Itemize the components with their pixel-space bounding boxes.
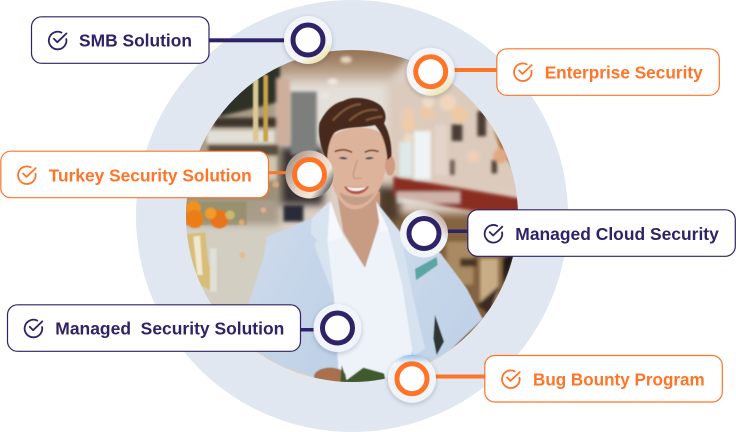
connector bbox=[446, 230, 468, 233]
collar bbox=[330, 201, 389, 230]
item: Managed Security Solution bbox=[8, 304, 362, 352]
icon: check bbox=[25, 320, 42, 337]
text: Managed Security Solution bbox=[55, 318, 284, 338]
connector bbox=[299, 328, 317, 332]
portrait photo bbox=[180, 45, 527, 392]
node bbox=[314, 304, 362, 352]
node bbox=[388, 355, 436, 403]
text: Enterprise Security bbox=[545, 63, 703, 83]
blazer bbox=[248, 218, 339, 377]
icon: check bbox=[514, 63, 532, 81]
icon: check bbox=[18, 166, 36, 184]
stubble bbox=[339, 192, 375, 205]
item: SMB Solution bbox=[32, 16, 332, 64]
connector bbox=[452, 68, 497, 72]
hand and greens bbox=[314, 367, 346, 382]
node bbox=[286, 150, 334, 198]
icon: check bbox=[49, 32, 66, 49]
icon: check bbox=[485, 225, 502, 243]
connector bbox=[267, 171, 289, 174]
connector bbox=[434, 374, 485, 378]
item: Enterprise Security bbox=[407, 48, 719, 96]
neck bbox=[337, 192, 380, 268]
nose shading bbox=[353, 160, 362, 178]
eyes bbox=[339, 157, 374, 159]
node bbox=[400, 210, 448, 258]
white shirt bbox=[325, 202, 413, 385]
node bbox=[284, 16, 332, 64]
pocket square bbox=[415, 257, 438, 280]
hair bbox=[319, 98, 391, 160]
lapels bbox=[311, 202, 333, 293]
item: Turkey Security Solution bbox=[1, 150, 334, 198]
connector bbox=[208, 38, 286, 42]
label box bbox=[497, 49, 719, 95]
smile bbox=[344, 186, 369, 194]
node bbox=[407, 48, 455, 96]
label box bbox=[485, 356, 722, 402]
man in light-blue blazer bbox=[248, 98, 483, 385]
label box bbox=[468, 210, 735, 256]
icon: check bbox=[502, 370, 520, 388]
restaurant background bbox=[180, 45, 527, 392]
item: Bug Bounty Program bbox=[388, 355, 722, 403]
ear bbox=[385, 156, 395, 176]
dark gap under arm bbox=[433, 315, 444, 355]
item: Managed Cloud Security bbox=[400, 210, 735, 258]
hair highlights bbox=[333, 104, 382, 120]
label box bbox=[1, 151, 269, 198]
eyebrows bbox=[335, 150, 379, 152]
text: Bug Bounty Program bbox=[533, 369, 705, 389]
label box bbox=[32, 17, 209, 63]
backdrop circle bbox=[136, 0, 568, 432]
text: Turkey Security Solution bbox=[49, 166, 252, 186]
face bbox=[327, 128, 387, 209]
text: Managed Cloud Security bbox=[515, 224, 719, 244]
label box bbox=[8, 305, 300, 351]
text: SMB Solution bbox=[79, 30, 192, 50]
